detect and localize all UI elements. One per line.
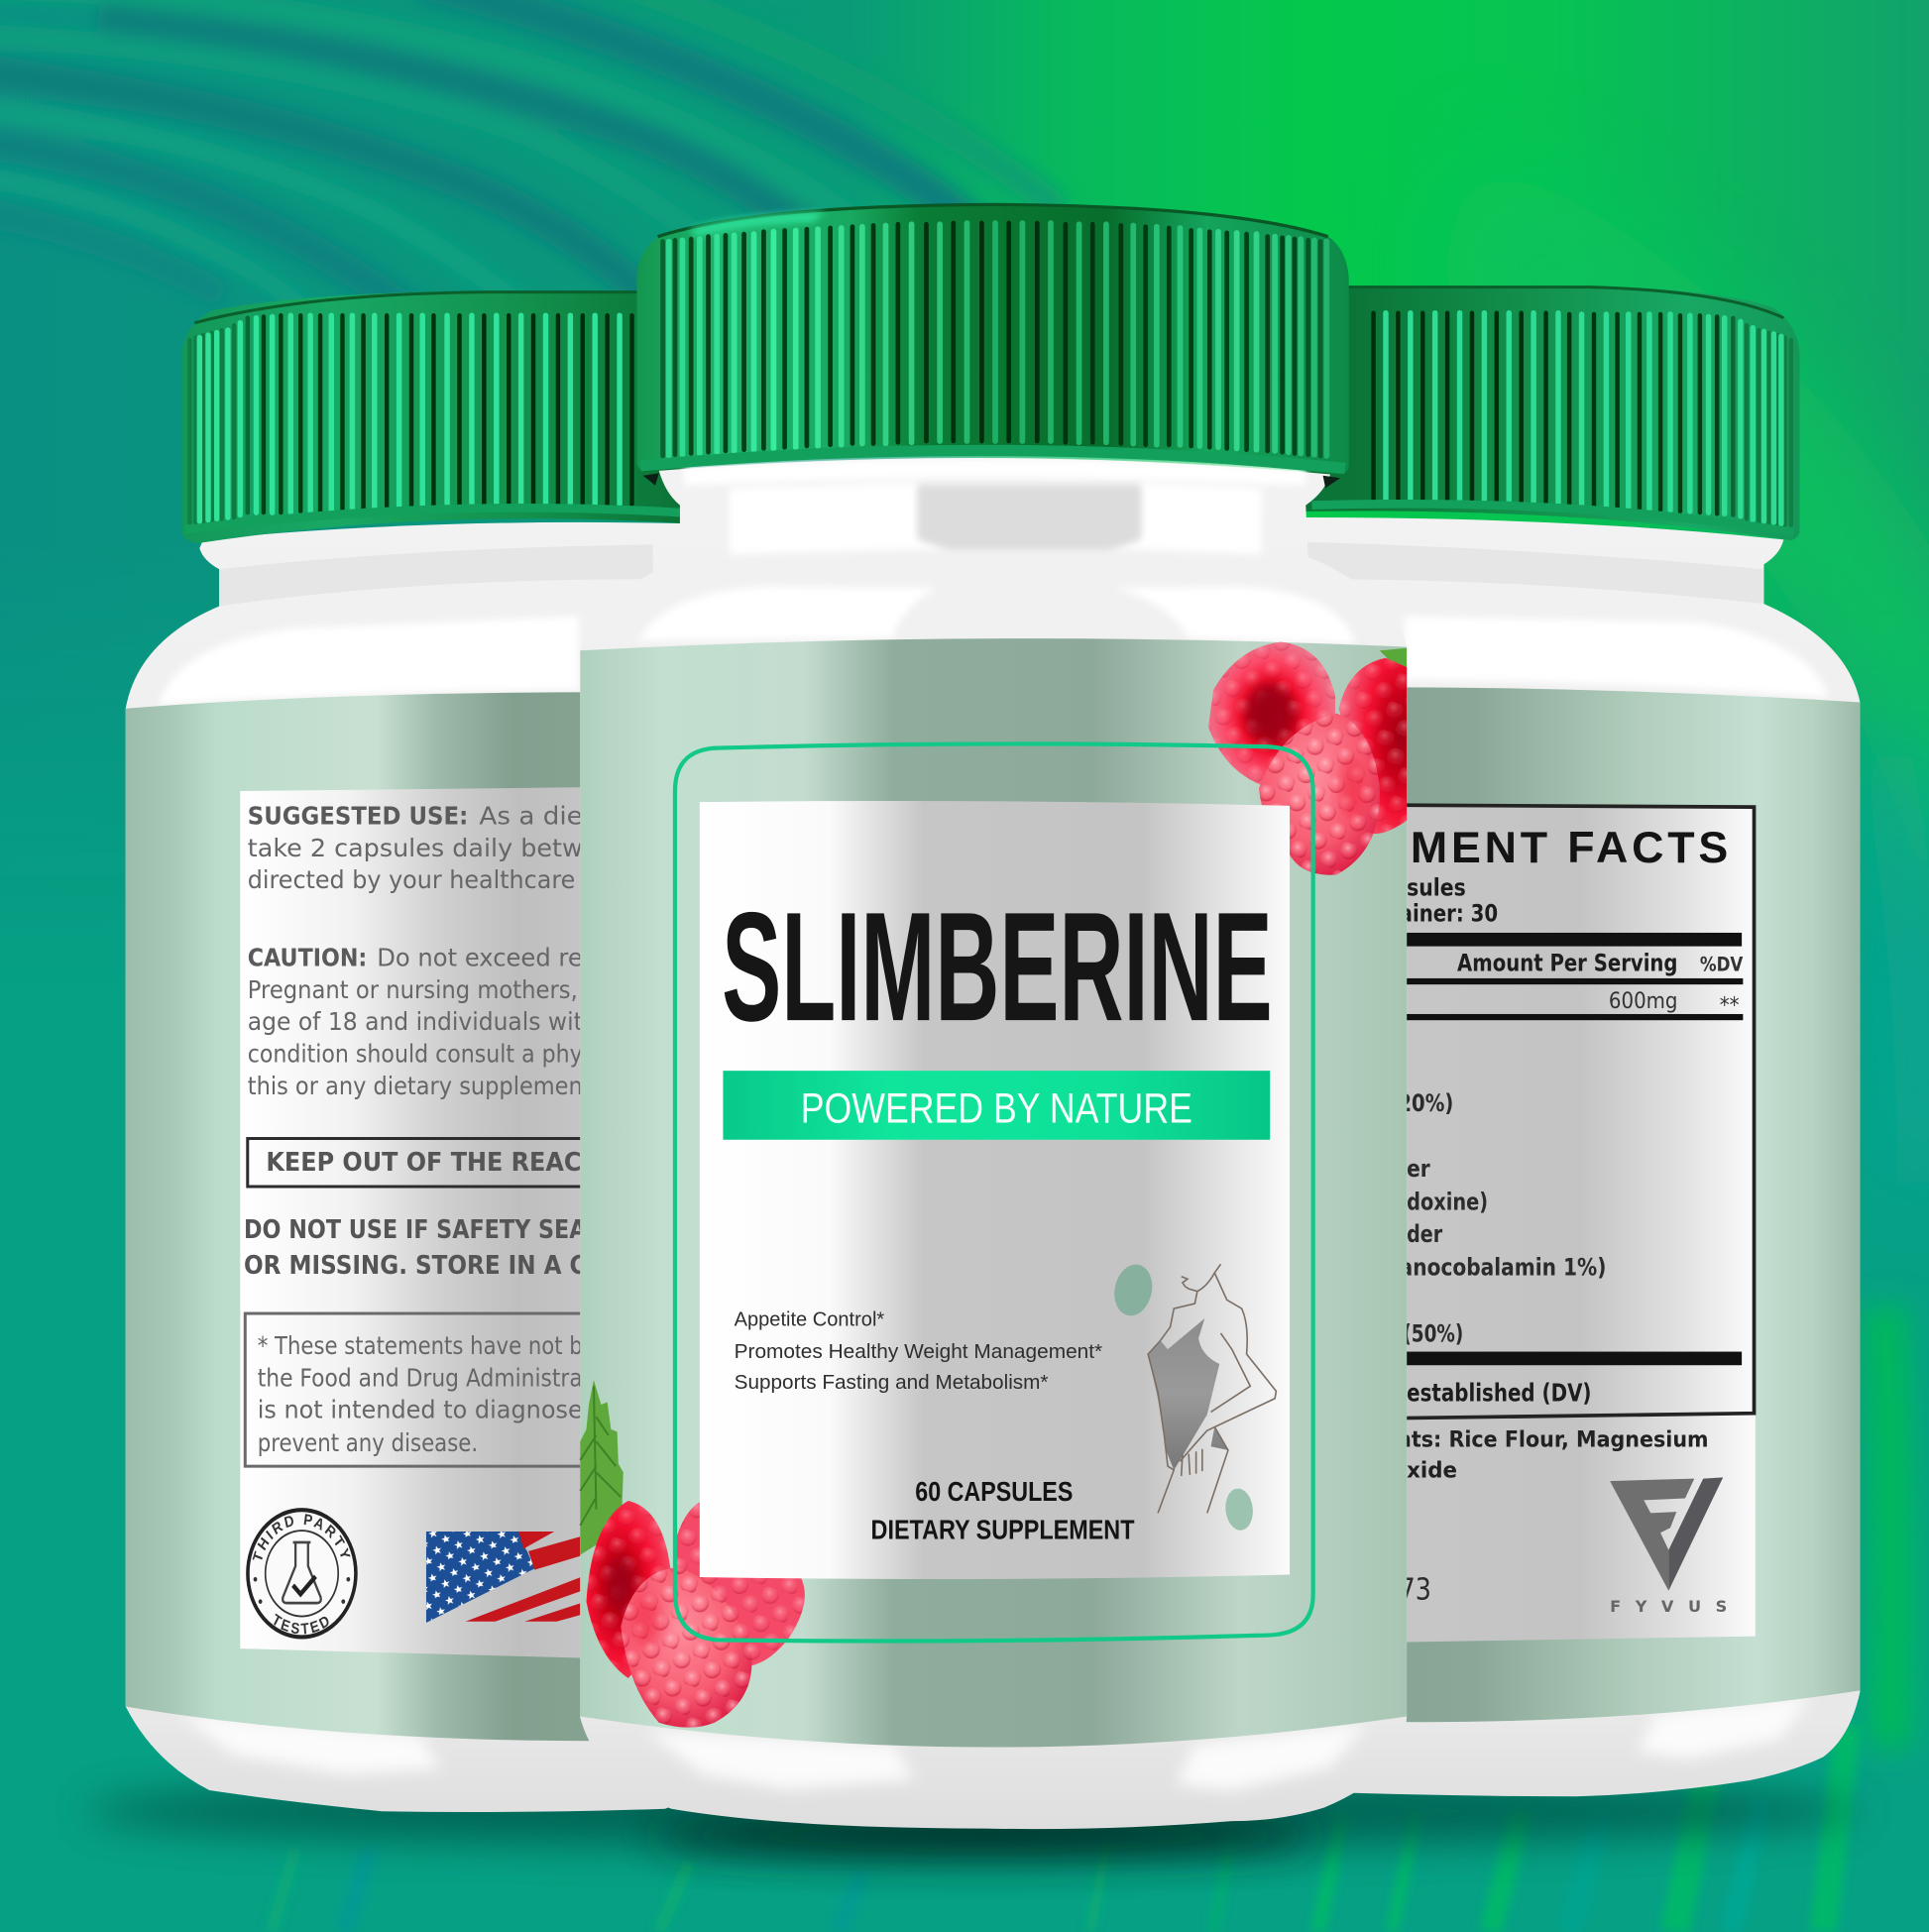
safety seal warning: OR MISSING. STORE IN A C bbox=[244, 1251, 587, 1281]
FYVUS logo bbox=[1610, 1477, 1727, 1616]
right bottle body bbox=[1305, 517, 1860, 1796]
amount per serving row: %DV bbox=[1700, 953, 1744, 975]
benefit list: Promotes Healthy Weight Management* bbox=[735, 1340, 1102, 1363]
facts rules bbox=[1305, 933, 1743, 1365]
caution text: age of 18 and individuals wit bbox=[248, 1007, 583, 1036]
capsule count and supplement line: DIETARY SUPPLEMENT bbox=[871, 1514, 1135, 1544]
caution text: condition should consult a phy bbox=[248, 1039, 583, 1068]
ingredient list fragments: doxine) bbox=[1407, 1189, 1488, 1216]
other ingredients bbox=[1397, 1426, 1709, 1483]
raspberry B bbox=[1338, 658, 1408, 835]
american flag bbox=[426, 1506, 690, 1623]
left bottle cap bbox=[182, 290, 690, 543]
raspberries top right bbox=[1208, 642, 1417, 875]
suggested use text bbox=[248, 802, 583, 894]
product name: SLIMBERINE bbox=[722, 880, 1273, 1054]
safety seal warning: DO NOT USE IF SAFETY SEA bbox=[244, 1215, 587, 1245]
raspberry F bbox=[674, 1501, 805, 1666]
center bottle mint label bbox=[580, 638, 1407, 1748]
icon: woman figure bbox=[1110, 1261, 1276, 1532]
third party tested badge bbox=[246, 1508, 358, 1640]
raspberry leaf bbox=[580, 1380, 624, 1555]
FDA disclaimer box bbox=[245, 1313, 664, 1466]
left bottle: back label bbox=[125, 290, 690, 1812]
center white label panel bbox=[700, 801, 1290, 1579]
raspberry E bbox=[621, 1567, 752, 1728]
suggested use text: take 2 capsules daily betw bbox=[248, 834, 583, 862]
keep out of reach box: KEEP OUT OF THE REACH bbox=[266, 1148, 601, 1178]
right bottle base highlight bbox=[1639, 1695, 1811, 1759]
FDA disclaimer box: is not intended to diagnose bbox=[258, 1396, 583, 1424]
center bottle body bbox=[580, 458, 1407, 1829]
center bottle base highlights bbox=[646, 1723, 1367, 1790]
right bottle: supplement facts bbox=[1305, 285, 1860, 1796]
left bottle shoulder highlight bbox=[161, 616, 579, 705]
FDA disclaimer box: * These statements have not b bbox=[258, 1331, 583, 1360]
green rounded frame bbox=[675, 743, 1313, 1642]
center bottle neck highlights bbox=[684, 459, 1305, 554]
FDA disclaimer box: prevent any disease. bbox=[258, 1428, 478, 1457]
benefit list: Appetite Control* bbox=[735, 1307, 884, 1330]
phone fragment: 73 bbox=[1400, 1572, 1431, 1607]
benefit list bbox=[735, 1307, 1102, 1394]
ingredient list fragments: der bbox=[1407, 1220, 1442, 1248]
serving size: ainer: 30 bbox=[1400, 900, 1498, 928]
center bottle neck shade bbox=[918, 486, 1141, 549]
serving size: sules bbox=[1407, 874, 1466, 902]
left bottle neck band bbox=[219, 544, 653, 607]
suggested use text: directed by your healthcare bbox=[248, 865, 575, 894]
FYVUS logo: FYVUS bbox=[1610, 1597, 1727, 1616]
raspberries bottom left bbox=[580, 1380, 805, 1728]
right bottle mint label bbox=[1305, 687, 1860, 1722]
other ingredients: nts: Rice Flour, Magnesium bbox=[1397, 1426, 1709, 1452]
keep out of reach box bbox=[248, 1139, 666, 1187]
tagline banner bbox=[723, 1071, 1270, 1140]
ingredient list fragments: anocobalamin 1%) bbox=[1400, 1253, 1606, 1281]
other ingredients: xide bbox=[1407, 1457, 1457, 1483]
benefit list: Supports Fasting and Metabolism* bbox=[735, 1371, 1049, 1394]
caution text: Pregnant or nursing mothers, bbox=[248, 975, 578, 1004]
leaf tip bbox=[1380, 648, 1407, 678]
FDA disclaimer box: the Food and Drug Administra bbox=[258, 1363, 583, 1392]
safety seal warning bbox=[244, 1215, 587, 1281]
caution text: CAUTION: bbox=[248, 943, 367, 972]
ground shadow bbox=[86, 1774, 1860, 1857]
caution text: Do not exceed re bbox=[377, 943, 583, 972]
ingredient list fragments: er bbox=[1407, 1155, 1430, 1183]
ingredient list fragments: (50%) bbox=[1403, 1320, 1463, 1348]
capsule count and supplement line: 60 CAPSULES bbox=[915, 1476, 1073, 1507]
left bottle base highlight bbox=[178, 1713, 441, 1774]
suggested use text: As a die bbox=[479, 802, 583, 831]
capsule count and supplement line bbox=[871, 1476, 1135, 1544]
supplement facts box bbox=[1305, 805, 1755, 1420]
center bottle shoulder highlights bbox=[638, 587, 1355, 643]
caution text: this or any dietary supplemen bbox=[248, 1072, 583, 1100]
amount per serving row: 600mg bbox=[1609, 988, 1677, 1014]
raspberry C bbox=[1259, 714, 1380, 875]
left white label panel bbox=[240, 786, 690, 1661]
center bottle cap bbox=[636, 204, 1349, 488]
tagline banner: POWERED BY NATURE bbox=[801, 1084, 1192, 1131]
right white label panel bbox=[1305, 803, 1756, 1644]
raspberry D bbox=[587, 1501, 671, 1678]
caution text bbox=[248, 943, 583, 1100]
third party tested badge: TESTED bbox=[274, 1614, 329, 1634]
left bottle mint label bbox=[126, 692, 690, 1741]
raspberry A bbox=[1208, 642, 1335, 790]
serving size bbox=[1400, 874, 1498, 928]
supplement facts title: MENT FACTS bbox=[1411, 823, 1732, 872]
third party tested badge: THIRD PARTY bbox=[252, 1514, 351, 1560]
amount per serving row bbox=[1457, 949, 1744, 1019]
ingredient list fragments: 20%) bbox=[1398, 1089, 1453, 1117]
right bottle neck band bbox=[1305, 542, 1763, 604]
ingredient list fragments: established (DV) bbox=[1407, 1378, 1592, 1407]
left bottle body bbox=[126, 522, 690, 1812]
amount per serving row: ** bbox=[1720, 993, 1740, 1019]
suggested use text: SUGGESTED USE: bbox=[248, 802, 468, 831]
ingredient list fragments bbox=[1398, 1089, 1606, 1407]
right bottle shoulder highlight bbox=[1405, 616, 1828, 698]
center bottle: front label bbox=[580, 204, 1417, 1829]
right bottle cap bbox=[1305, 285, 1800, 540]
amount per serving row: Amount Per Serving bbox=[1457, 949, 1677, 976]
